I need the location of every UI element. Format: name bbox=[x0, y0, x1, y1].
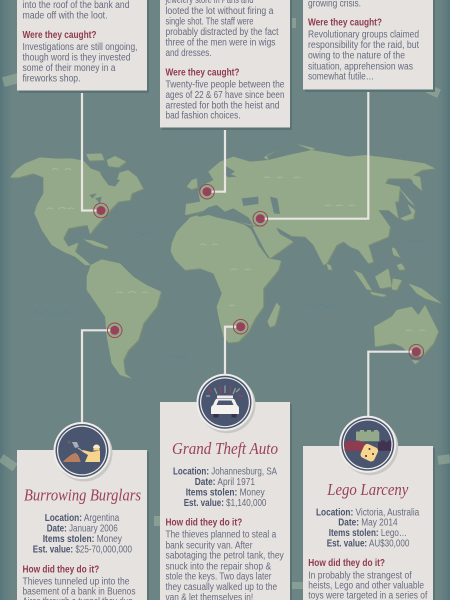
how they did it bbox=[22, 564, 136, 600]
Sakhalin and Japan bbox=[397, 185, 415, 207]
panel: top right heist: somewhat futile… bbox=[308, 72, 374, 82]
connector: New York pin to top left panel bbox=[82, 88, 101, 210]
world map bbox=[10, 144, 442, 378]
panel: top left heist: some of their money in a bbox=[22, 63, 116, 74]
Indonesia bbox=[353, 270, 372, 290]
panel: top middle heist: Were they caught? bbox=[166, 68, 240, 78]
panel: top left heist: fireworks shop. bbox=[22, 74, 80, 84]
connector: Middle East pin to top right panel bbox=[260, 87, 368, 219]
facts bbox=[316, 507, 420, 550]
how they did it: basement of a bank in Buenos bbox=[22, 586, 136, 597]
facts bbox=[33, 513, 132, 556]
Africa bbox=[171, 213, 281, 343]
connector: Paris pin to top middle panel bbox=[207, 125, 225, 192]
pin: Argentina bbox=[107, 323, 122, 338]
facts: Location: Argentina bbox=[45, 513, 120, 524]
panel: top middle heist: ages of 22 & 67 have since been bbox=[166, 90, 284, 101]
panel: Burrowing Burglars bbox=[17, 422, 149, 600]
pin: Australia bbox=[409, 344, 424, 359]
facts: Date: April 1971 bbox=[195, 477, 255, 488]
how they did it: How did they do it? bbox=[166, 518, 242, 529]
panel: top left heist: made off with the loot. bbox=[22, 10, 108, 22]
pin: South Africa bbox=[233, 319, 248, 334]
Australia bbox=[374, 305, 438, 357]
Tasmania bbox=[412, 360, 419, 364]
Philippines bbox=[392, 247, 400, 257]
panel: top left heist: Investigations are still ongoing, bbox=[22, 42, 138, 53]
panel: top left heist: Were they caught? bbox=[22, 30, 96, 41]
facts: Est. value: $1,140,000 bbox=[184, 498, 267, 509]
panel: top right heist: situation, apprehension was bbox=[308, 62, 413, 72]
North America bbox=[10, 157, 143, 265]
pin: Middle East bbox=[253, 211, 268, 226]
seas cut into the land bbox=[89, 166, 280, 257]
facts bbox=[173, 467, 277, 509]
Sri Lanka bbox=[327, 264, 332, 270]
South America bbox=[87, 259, 161, 378]
panel: Grand Theft Auto bbox=[160, 374, 292, 600]
panel: top middle heist: single shot. The staff were bbox=[166, 16, 254, 28]
pin: New York bbox=[94, 203, 108, 218]
panel: top middle heist: arrested for both the heist and bbox=[166, 100, 280, 112]
icon: burrowing thief bbox=[54, 422, 112, 482]
Arctic islands bbox=[86, 153, 104, 161]
title: Burrowing Burglars bbox=[24, 486, 141, 504]
panel: top left heist: into the roof of the bank and bbox=[22, 0, 130, 11]
how they did it: heists, Lego and other valuable bbox=[308, 580, 424, 591]
connector: Argentina pin to bottom left panel bbox=[82, 330, 115, 425]
panel: top left heist: though word is they invested bbox=[22, 52, 130, 64]
Arabia bbox=[250, 227, 293, 258]
panel: top right heist: Revolutionary groups claimed bbox=[308, 30, 419, 40]
New Guinea bbox=[408, 283, 442, 303]
panel: top right heist: responsibility for the raid, but bbox=[308, 40, 419, 51]
how they did it bbox=[166, 518, 284, 600]
title: Grand Theft Auto bbox=[172, 439, 278, 458]
facts: Date: May 2014 bbox=[338, 518, 398, 529]
panel: top middle heist: probably distracted by the fact bbox=[166, 27, 279, 38]
land and sea ripples bbox=[31, 168, 425, 358]
panel: top middle heist: Twenty-five people between the bbox=[166, 80, 285, 90]
Eurasia bbox=[185, 150, 435, 265]
facts: Location: Victoria, Australia bbox=[316, 507, 420, 518]
facts: Date: January 2006 bbox=[47, 524, 118, 535]
title: Lego Larceny bbox=[326, 480, 409, 499]
Kamchatka bbox=[410, 175, 422, 191]
panel: Lego Larceny bbox=[303, 416, 435, 600]
Madagascar bbox=[267, 303, 280, 327]
how they did it: they casually walked up to the bbox=[166, 582, 278, 593]
connector: South Africa pin to bottom middle panel bbox=[225, 327, 241, 375]
how they did it: How did they do it? bbox=[308, 558, 385, 569]
connector: Australia pin to bottom right panel bbox=[368, 352, 416, 418]
how they did it: The thieves planned to steal a bbox=[166, 530, 277, 541]
facts: Items stolen: Money bbox=[186, 488, 265, 499]
how they did it: In probably the strangest of bbox=[308, 570, 412, 581]
panel: top right heist: owing to the nature of the bbox=[308, 50, 405, 62]
how they did it: bank security van. After bbox=[166, 540, 253, 551]
Novaya Zemlya bbox=[297, 144, 315, 150]
facts: Items stolen: Lego… bbox=[329, 528, 407, 539]
pin: Paris bbox=[200, 184, 214, 199]
panel: top middle heist: and dresses. bbox=[166, 48, 212, 59]
icon: police car bbox=[196, 374, 256, 433]
panel: top middle heist: bad fashion choices. bbox=[166, 110, 240, 122]
facts: Est. value: $25-70,000,000 bbox=[33, 545, 132, 556]
panel: top right heist: Were they caught? bbox=[308, 18, 382, 28]
how they did it: sabotaging the petrol tank, they bbox=[166, 551, 284, 562]
facts: Location: Johannesburg, SA bbox=[173, 467, 277, 478]
icon: lego bricks and head bbox=[339, 416, 398, 475]
panel: top middle heist: looted the lot without firing a bbox=[166, 6, 274, 17]
Cuba and Caribbean bbox=[83, 239, 108, 249]
how they did it: stole the keys. Two days later bbox=[166, 572, 272, 583]
panel: top middle heist bbox=[160, 0, 292, 130]
panel: top middle heist: three of the men were in wigs bbox=[166, 38, 276, 48]
how they did it bbox=[308, 558, 427, 600]
facts: Items stolen: Money bbox=[43, 534, 122, 545]
how they did it: How did they do it? bbox=[22, 564, 99, 575]
panel: top left heist bbox=[17, 0, 149, 93]
how they did it: snuck into the repair shop & bbox=[166, 561, 271, 572]
how they did it: Thieves tunneled up into the bbox=[22, 576, 130, 587]
panel: top right heist bbox=[303, 0, 435, 92]
UK bbox=[187, 178, 197, 189]
facts: Est. value: AU$30,000 bbox=[327, 539, 410, 550]
